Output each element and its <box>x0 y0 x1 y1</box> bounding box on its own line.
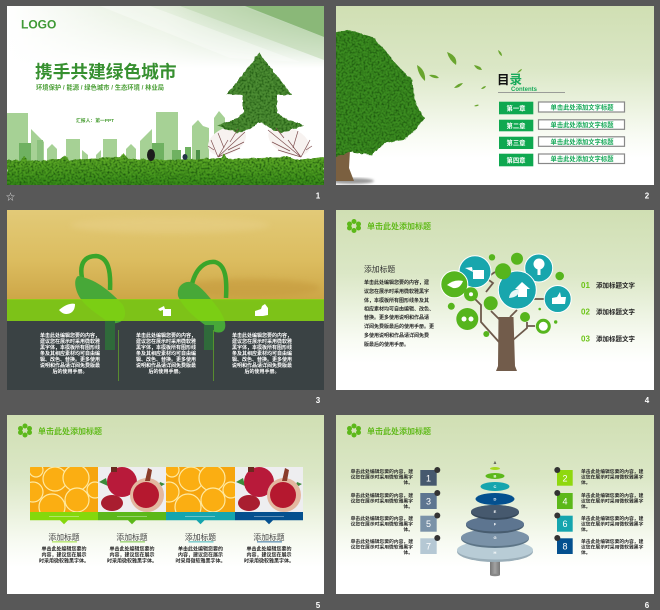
column 1 text: 时采用微软雅黑字体。 <box>39 558 89 564</box>
text block <box>364 264 434 348</box>
icon: house and leaf <box>255 304 268 316</box>
numbered labels <box>581 280 636 344</box>
layered cone chart: H <box>494 550 497 555</box>
layered cone chart: E <box>494 509 497 514</box>
numbered labels: 添加标题文字 <box>596 280 636 290</box>
text column 1 <box>40 332 100 375</box>
subtitle: 环境保护 / 能源 / 绿色城市 / 生态环境 / 林业局 <box>36 82 164 92</box>
presenter: 汇报人：第一PPT <box>76 117 114 124</box>
layered cone chart <box>457 460 533 576</box>
column 3 text: 添加标题 <box>185 532 216 542</box>
text block: 相应素材均可自由编辑、改色、 <box>364 306 434 312</box>
column 4 text: 内容，建议您在展示 <box>246 552 292 558</box>
column 2 text: 内容，建议您在展示 <box>109 552 155 558</box>
photo: oranges 1 <box>30 467 98 512</box>
text blocks right: 体。 <box>581 549 591 556</box>
column 2 text <box>107 532 157 564</box>
icon: star: ☆ <box>6 192 15 202</box>
chapter list: 第一章 <box>507 104 526 112</box>
chapter list: 单击此处添加文字标题 <box>551 154 614 163</box>
slide 6 heading: 单击此处添加标题 <box>367 426 431 436</box>
text blocks left: 议您在展示时采用微软雅黑字 <box>351 520 413 528</box>
chapter list: 第四章 <box>507 155 526 164</box>
city skyline <box>7 111 225 161</box>
page number 2: 2 <box>645 192 650 200</box>
text column 2: 后的使用手册。 <box>148 368 184 375</box>
text block: 体，本模板所有图形线条及其 <box>364 297 429 304</box>
text blocks right: 议您在展示时采用微软雅黑字 <box>581 520 644 528</box>
text column 3: 说明和作品请详阅免费版最 <box>232 362 292 369</box>
numbered squares left: 3 <box>426 496 431 506</box>
text blocks left: 单击此处编辑您要的内容，建 <box>351 468 413 475</box>
page number 5: 5 <box>316 601 321 610</box>
text block: 议您在展示时采用微软雅黑字 <box>364 288 429 295</box>
layered cone chart: F <box>494 522 497 526</box>
seedlings <box>75 256 226 350</box>
text column 1: 条及其相应素材均可自由编 <box>40 350 100 357</box>
layered cone chart: D <box>494 496 497 502</box>
text column 2: 条及其相应素材均可自由编 <box>136 350 196 357</box>
text column 1: 建议您在展示时采用微软雅 <box>40 338 100 345</box>
chapter list: 第三章 <box>507 138 526 147</box>
column 4 text: 单击此处编辑您要的 <box>246 546 292 552</box>
numbered labels: 01 <box>581 281 590 290</box>
chapter list <box>499 102 624 166</box>
numbered squares left: 7 <box>426 542 431 552</box>
column 2 text: 时采用微软雅黑字体。 <box>107 558 157 564</box>
column divider left <box>118 330 119 381</box>
photo: pomegranates 1 <box>98 467 166 512</box>
slide 4 heading: 单击此处添加标题 <box>367 221 431 231</box>
panel: slide 2 contents <box>330 6 654 185</box>
contents heading <box>497 73 565 93</box>
text blocks left: 单击此处编辑您要的内容，建 <box>351 492 413 499</box>
text column 3: 后的使用手册。 <box>244 368 280 375</box>
flying leaves <box>417 50 522 106</box>
text column 1: 单击此处编辑您要的内容， <box>40 332 100 339</box>
text blocks left: 议您在展示时采用微软雅黑字 <box>351 544 413 550</box>
tree arrow <box>203 53 314 162</box>
page number 1: 1 <box>316 192 321 200</box>
big tree <box>330 30 425 184</box>
column 3 text: 内容，建议您在展示 <box>178 552 223 558</box>
panel: slide 4 tree diagram <box>336 210 654 390</box>
text column 3: 单击此处编辑您要的内容， <box>232 332 292 339</box>
text column 1: 后的使用手册。 <box>52 368 88 375</box>
text blocks right: 议您在展示时采用微软雅黑字 <box>581 474 644 480</box>
chapter list: 单击此处添加文字标题 <box>551 120 614 129</box>
page number 4: 4 <box>645 396 650 405</box>
text blocks right: 体。 <box>581 503 591 510</box>
text column 3: 条及其相应素材均可自由编 <box>232 350 292 357</box>
column 4 text <box>244 532 294 564</box>
contents heading: Contents <box>511 87 538 93</box>
text blocks left <box>351 468 413 556</box>
layered cone chart: C <box>494 484 497 489</box>
column 3 text: 时采用微软雅黑字体。 <box>175 558 226 564</box>
chapter list: 单击此处添加文字标题 <box>551 102 614 111</box>
slide 5 heading <box>18 424 102 438</box>
column 1 text: 单击此处编辑您要的 <box>41 546 87 552</box>
logo: LOGO <box>21 18 56 32</box>
panel: slide 1 cover <box>7 6 324 187</box>
column 4 text: 添加标题 <box>253 532 285 542</box>
text column 3: 建议您在展示时采用微软雅 <box>232 338 292 345</box>
numbered squares left: 1 <box>426 474 431 484</box>
column 2 text: 添加标题 <box>116 532 148 542</box>
text column 1: 辑、改色、替换。更多使用 <box>40 356 100 363</box>
text column 1: 说明和作品请详阅免费版最 <box>40 362 100 369</box>
icon: leaf <box>59 304 75 314</box>
text blocks right: 议您在展示时采用微软雅黑字 <box>581 544 644 550</box>
numbered squares right: 6 <box>562 519 568 529</box>
text blocks left: 单击此处编辑您要的内容，建 <box>351 538 413 545</box>
numbered labels: 03 <box>581 334 590 344</box>
numbered labels: 添加标题文字 <box>596 334 636 343</box>
text blocks left: 体。 <box>403 549 413 556</box>
slide 5 heading: 单击此处添加标题 <box>38 426 102 436</box>
text column 2: 单击此处编辑您要的内容， <box>136 332 196 339</box>
text blocks left: 单击此处编辑您要的内容，建 <box>351 515 413 522</box>
layered cone chart: B <box>494 474 497 478</box>
slide 4 heading <box>347 219 431 233</box>
page number 6: 6 <box>645 601 650 610</box>
column 1 text: 内容，建议您在展示 <box>41 552 87 558</box>
text column 2 <box>136 332 196 375</box>
text column 2: 辑、改色、替换。更多使用 <box>136 356 196 363</box>
text column 3: 辑、改色、替换。更多使用 <box>232 356 292 363</box>
numbered labels: 02 <box>581 308 590 316</box>
layered cone chart: G <box>493 535 497 540</box>
text column 2: 建议您在展示时采用微软雅 <box>136 338 196 345</box>
numbered squares right <box>554 467 573 554</box>
page number 3: 3 <box>316 396 321 405</box>
text blocks right: 单击此处编辑您要的内容，建 <box>581 515 644 522</box>
text block: 替换。更多使用说明和作品请 <box>364 314 429 321</box>
numbered squares right: 8 <box>562 542 568 552</box>
column 1 text <box>39 532 89 564</box>
green band <box>7 299 324 321</box>
text block: 版最后的使用手册。 <box>364 341 409 348</box>
text blocks left: 体。 <box>403 479 413 486</box>
text blocks left: 议您在展示时采用微软雅黑字 <box>351 498 413 504</box>
text blocks left: 议您在展示时采用微软雅黑字 <box>351 474 413 480</box>
photo: pomegranates 2 <box>235 467 303 512</box>
text blocks left: 体。 <box>403 526 413 533</box>
text blocks right: 单击此处编辑您要的内容，建 <box>581 538 644 545</box>
text blocks right <box>581 468 644 556</box>
panel: slide 6 layered tree <box>336 415 654 594</box>
column 4 text: 时采用微软雅黑字体。 <box>244 558 294 564</box>
numbered squares right: 2 <box>562 474 568 484</box>
column 3 text: 单击此处编辑您要的 <box>178 546 223 552</box>
text blocks right: 单击此处编辑您要的内容，建 <box>581 492 644 499</box>
text blocks right: 体。 <box>581 526 591 533</box>
panel: slide 5 four columns <box>7 415 324 594</box>
text block: 详阅免费版最后的使用手册。更 <box>364 323 434 330</box>
text column 3 <box>232 332 292 375</box>
text column 1: 黑字体，本模板所有图形线 <box>40 344 100 351</box>
numbered squares left <box>420 467 440 554</box>
numbered labels: 添加标题文字 <box>596 307 636 316</box>
text block: 添加标题 <box>364 264 395 274</box>
layered cone chart: A <box>494 460 497 465</box>
text block: 单击此处编辑您要的内容，建 <box>364 279 429 286</box>
grass <box>7 149 324 187</box>
column 1 text: 添加标题 <box>48 532 80 542</box>
text blocks right: 议您在展示时采用微软雅黑字 <box>581 498 644 504</box>
panel: slide 3 seedlings <box>7 210 324 390</box>
text column 2: 黑字体，本模板所有图形线 <box>136 344 196 351</box>
icon: watering can <box>158 306 171 316</box>
slide 6 heading <box>347 424 431 438</box>
text block: 多使用说明和作品请详阅免费 <box>364 332 429 339</box>
text blocks right: 单击此处编辑您要的内容，建 <box>581 468 644 475</box>
column 2 text: 单击此处编辑您要的 <box>109 546 155 552</box>
text blocks right: 体。 <box>581 479 591 486</box>
chapter list: 单击此处添加文字标题 <box>551 137 614 146</box>
text blocks left: 体。 <box>403 503 413 510</box>
tree chart <box>441 253 571 371</box>
numbered squares left: 5 <box>426 519 431 529</box>
text column 2: 说明和作品请详阅免费版最 <box>136 362 196 369</box>
title: 携手共建绿色城市 <box>35 61 177 82</box>
colour bands with pointers <box>30 512 303 524</box>
column 3 text <box>175 532 226 564</box>
photo: oranges 2 <box>166 467 235 512</box>
numbered squares right: 4 <box>562 496 568 506</box>
chapter list: 第二章 <box>507 121 526 130</box>
contents heading: 目录 <box>497 73 522 87</box>
column divider right <box>213 330 214 381</box>
photo: sand and soil <box>7 210 324 390</box>
text column 3: 黑字体，本模板所有图形线 <box>232 344 292 351</box>
